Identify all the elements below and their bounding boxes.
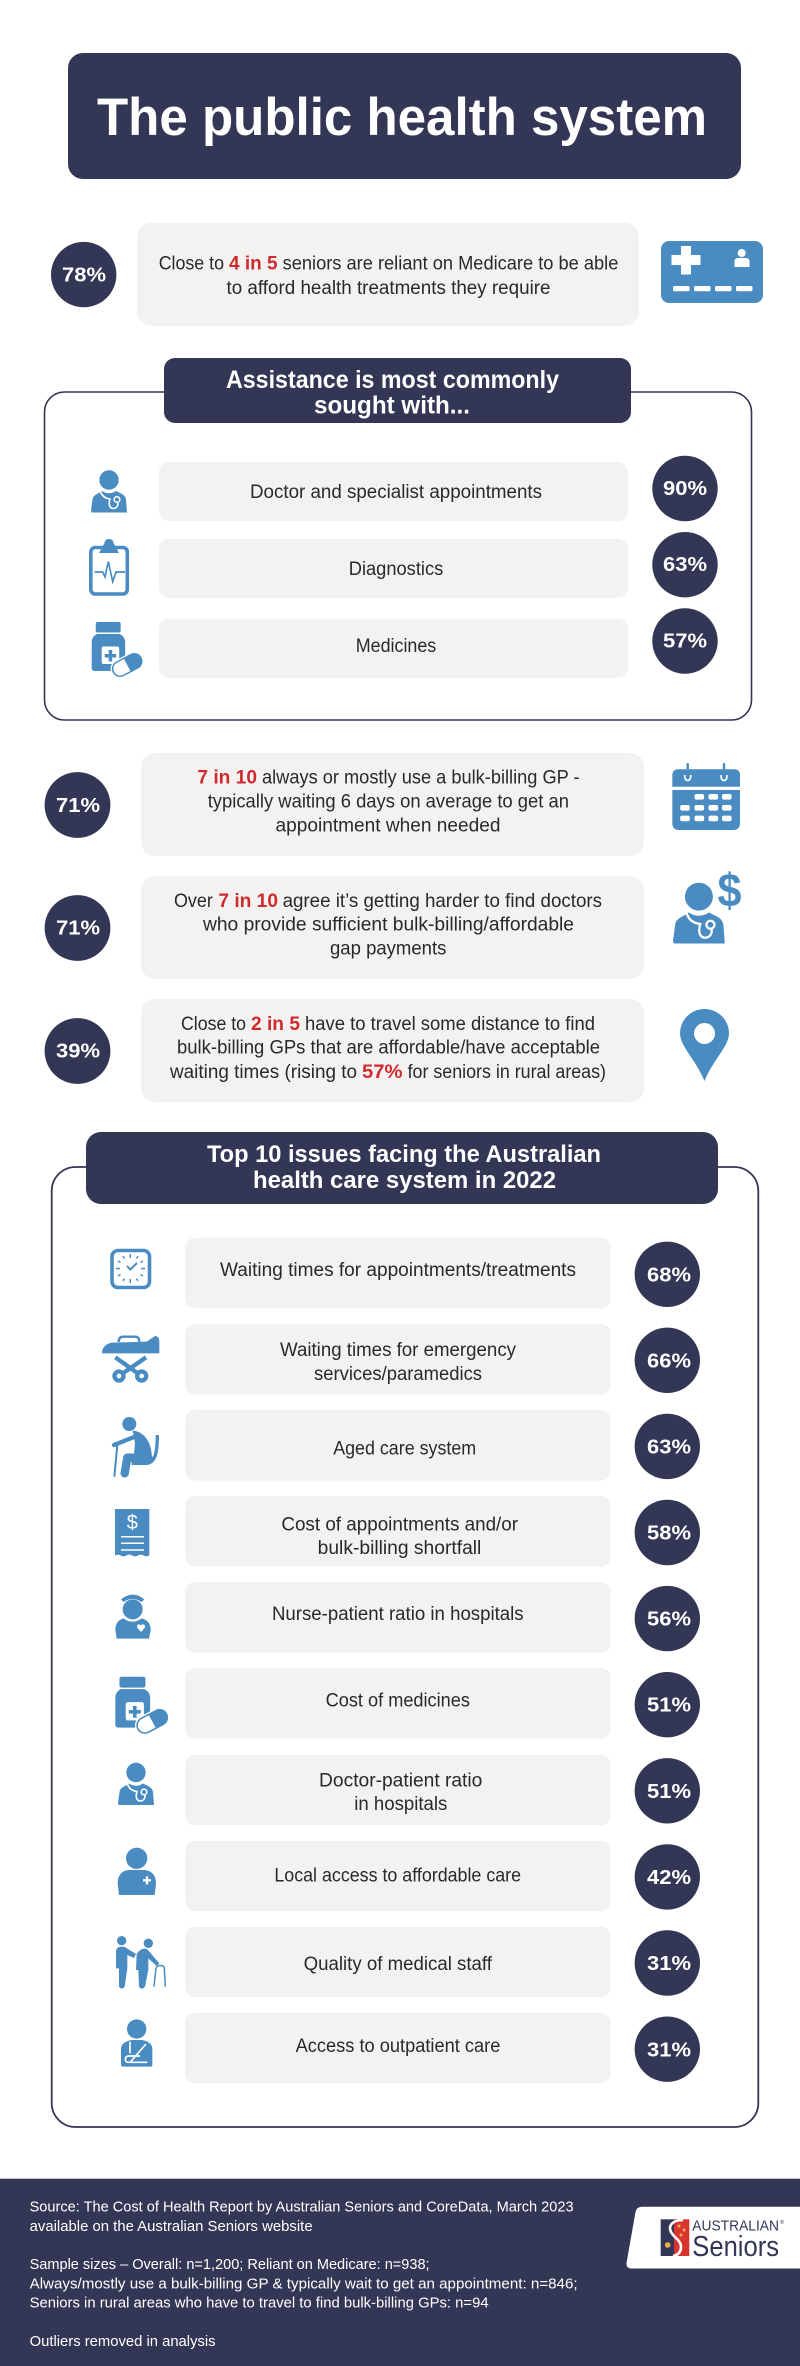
issue 2: emergency services [102, 1324, 700, 1394]
row: doctor and specialist appointments: Doctor and specialist appointments [250, 482, 542, 503]
text card [141, 999, 644, 1102]
icon: medicine bottle and pill [92, 622, 147, 682]
source and sample notes: Always/mostly use a bulk-billing GP & typically wait to get an appointment: n=846; [30, 2277, 578, 2293]
logo: Australian Seniors [626, 2207, 800, 2268]
panel heading: sought with... [314, 392, 470, 420]
icon: doctor [118, 1763, 154, 1805]
issue 4: cost of appointments: Cost of appointments and/or [281, 1515, 519, 1536]
source and sample notes: Outliers removed in analysis [30, 2334, 216, 2350]
issue 6: cost of medicines [115, 1668, 700, 1739]
row: doctor and specialist appointments [91, 456, 718, 521]
text card: 7 in 10 [197, 768, 257, 789]
issue 10: access to outpatient care: 31% [647, 2039, 691, 2061]
issue 2: emergency services: 66% [647, 1350, 691, 1372]
issue 1: waiting times: 68% [647, 1264, 691, 1286]
icon: clock [112, 1250, 150, 1288]
Medicare text card: to afford health treatments they require [226, 278, 550, 299]
issue 9: quality of medical staff [116, 1927, 700, 1997]
stat circle 71% [45, 895, 110, 961]
icon: doctor [91, 470, 127, 512]
title banner [68, 53, 741, 179]
icon: receipt [115, 1509, 149, 1556]
icon: calendar [672, 763, 740, 830]
stat circle 71% [45, 772, 110, 838]
icon: seated elderly person with cane [114, 1417, 157, 1477]
source and sample notes: available on the Australian Seniors website [30, 2219, 313, 2235]
footer band [0, 2179, 800, 2366]
stat circle 39%: 39% [56, 1040, 100, 1062]
issue 7: doctor-patient ratio: Doctor-patient ratio [319, 1771, 482, 1792]
panel heading [86, 1132, 718, 1204]
icon: stretcher [102, 1336, 159, 1383]
row: medicines: Medicines [356, 636, 436, 657]
stat row: harder to find doctors [45, 864, 742, 979]
text card: bulk-billing GPs that are affordable/have acceptable [177, 1038, 600, 1059]
Medicare text card [137, 223, 639, 326]
row: medicines: 57% [663, 630, 707, 652]
panel heading: health care system in 2022 [253, 1167, 556, 1194]
issue 7: doctor-patient ratio: in hospitals [354, 1794, 447, 1815]
stat row: Medicare reliance [51, 223, 763, 326]
icon: Medicare card [661, 241, 763, 303]
issue 2: emergency services: Waiting times for emergency [280, 1340, 516, 1361]
stat circle 71%: 71% [56, 795, 100, 817]
issue 3: aged care system [114, 1410, 700, 1480]
issue 6: cost of medicines: Cost of medicines [326, 1691, 470, 1712]
panel heading [164, 358, 631, 423]
stat row: bulk-billing GP use [45, 753, 740, 856]
text card: who provide sufficient bulk-billing/affordable [202, 915, 574, 936]
icon: person with plus [118, 1848, 156, 1895]
text card: Close to [181, 1014, 246, 1035]
icon: carer and person with walker [116, 1936, 165, 1989]
issue 7: doctor-patient ratio [118, 1755, 700, 1825]
stat circle 71%: 71% [56, 918, 100, 940]
icon: doctor with dollar sign: $ [718, 864, 742, 916]
issue 9: quality of medical staff: 31% [647, 1953, 691, 1975]
text card: appointment when needed [276, 815, 500, 836]
text card: agree it’s getting harder to find doctors [283, 891, 602, 912]
text card: 2 in 5 [251, 1014, 300, 1035]
stat row: travel to find bulk-billing GPs [45, 999, 729, 1102]
icon: nurse [115, 1595, 151, 1639]
text card: gap payments [330, 938, 446, 959]
icon: doctor with dollar sign [673, 864, 742, 943]
issue 4: cost of appointments [115, 1496, 700, 1566]
issue 8: local access [118, 1841, 700, 1911]
stat circle 39% [45, 1018, 110, 1084]
source and sample notes: Seniors in rural areas who have to travel to find bulk-billing GPs: n=94 [30, 2296, 489, 2312]
source and sample notes: Source: The Cost of Health Report by Australian Seniors and CoreData, March 2023 [30, 2200, 574, 2216]
text card [141, 876, 644, 979]
title banner: The public health system [97, 88, 707, 147]
text card [141, 753, 644, 856]
icon: receipt: $ [127, 1512, 138, 1534]
row: medicines [92, 608, 718, 682]
issue 5: nurse-patient ratio [115, 1582, 700, 1652]
icon: location pin [680, 1009, 729, 1081]
source and sample notes: Sample sizes – Overall: n=1,200; Reliant on Medicare: n=938; [30, 2257, 430, 2273]
issue 6: cost of medicines: 51% [647, 1694, 691, 1716]
issue 2: emergency services: services/paramedics [314, 1364, 482, 1385]
text card: have to travel some distance to find [305, 1014, 595, 1035]
icon: medicine bottle and pill [115, 1677, 173, 1739]
row: diagnostics: Diagnostics [349, 559, 443, 580]
text card: 7 in 10 [218, 891, 278, 912]
Medicare text card: Close to [159, 254, 224, 274]
issue 10: access to outpatient care [121, 2013, 700, 2083]
issue 5: nurse-patient ratio: Nurse-patient ratio in hospitals [272, 1604, 524, 1625]
icon: person with arm sling [121, 2019, 152, 2067]
text card: typically waiting 6 days on average to get an [208, 792, 569, 813]
text card: waiting times (rising to [169, 1062, 357, 1083]
issue 1: waiting times [112, 1238, 700, 1308]
issue 9: quality of medical staff: Quality of medical staff [304, 1954, 493, 1975]
issue 3: aged care system: Aged care system [333, 1438, 476, 1459]
stat circle 78% [51, 242, 116, 307]
source and sample notes [30, 2200, 578, 2350]
text card: for seniors in rural areas) [408, 1062, 606, 1083]
logo: Australian Seniors: AUSTRALIAN [692, 2218, 779, 2235]
issue 4: cost of appointments: bulk-billing shortfall [318, 1538, 481, 1559]
issue 7: doctor-patient ratio: 51% [647, 1781, 691, 1803]
row: doctor and specialist appointments: 90% [663, 478, 707, 500]
Medicare text card: seniors are reliant on Medicare to be able [283, 254, 618, 274]
panel: top 10 issues [52, 1132, 758, 2127]
logo: Australian Seniors: ® [780, 2219, 784, 2226]
stat circle 78%: 78% [62, 264, 106, 286]
issue 8: local access: 42% [647, 1867, 691, 1889]
icon: clipboard [91, 539, 127, 594]
Medicare text card: 4 in 5 [229, 254, 278, 274]
panel heading: Top 10 issues facing the Australian [207, 1141, 601, 1168]
text card: always or mostly use a bulk-billing GP - [262, 768, 580, 789]
text card: 57% [362, 1062, 403, 1083]
issue 4: cost of appointments: 58% [647, 1522, 691, 1544]
row: diagnostics [91, 532, 718, 598]
issue 1: waiting times: Waiting times for appointments/treatments [220, 1260, 576, 1281]
issue 3: aged care system: 63% [647, 1436, 691, 1458]
panel heading: Assistance is most commonly [226, 366, 559, 394]
text card: Over [174, 891, 213, 912]
row: diagnostics: 63% [663, 554, 707, 576]
logo: Australian Seniors: Seniors [692, 2231, 779, 2263]
issue 5: nurse-patient ratio: 56% [647, 1608, 691, 1630]
panel: assistance most commonly sought [44, 358, 752, 720]
issue 8: local access: Local access to affordable care [274, 1866, 521, 1887]
issue 10: access to outpatient care: Access to outpatient care [296, 2036, 500, 2057]
